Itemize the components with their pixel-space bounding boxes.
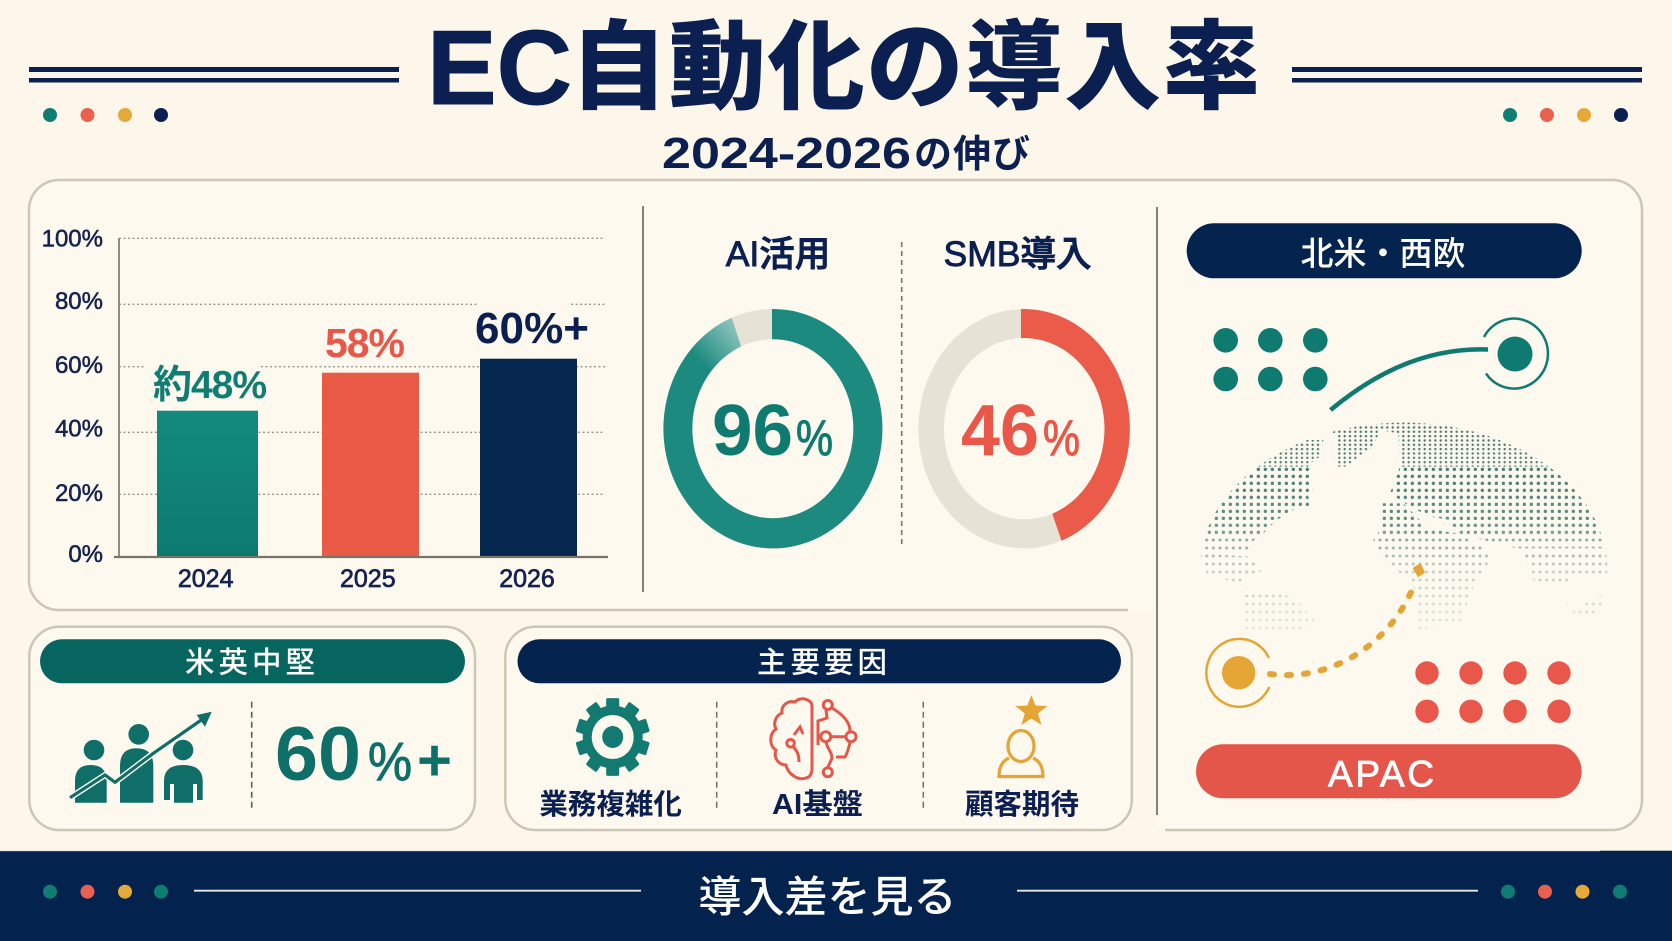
- donut: SMB導入 46%: [918, 309, 1130, 548]
- x axis labels: 2026: [499, 565, 555, 593]
- dot grid: 北米・西欧: [1213, 328, 1328, 391]
- label: AI基盤: AI基盤: [772, 788, 863, 821]
- footer bar: [0, 850, 1672, 941]
- label: 業務複雑化: 業務複雑化: [539, 789, 682, 821]
- icon: brain circuit: [771, 699, 856, 779]
- panel: 米英中堅: [29, 627, 475, 830]
- footer dots right: [1501, 885, 1627, 899]
- header dots left: [43, 108, 168, 122]
- stat: 60%+: %: [368, 732, 412, 792]
- arrow: APAC dashed curve and target: [1206, 563, 1425, 707]
- dot grid: APAC: [1415, 661, 1571, 723]
- pill: APAC: APAC: [1328, 754, 1434, 794]
- footer dots left: [43, 885, 168, 899]
- subtitle: 2024-2026: [662, 129, 911, 178]
- pill heading: 主要要因: 主要要因: [757, 646, 891, 680]
- x axis labels: [178, 565, 555, 593]
- donut heading: AI活用: AI活用: [726, 234, 830, 274]
- pill: 北米・西欧: [1187, 223, 1582, 278]
- value label 2026: 60%+: [475, 304, 589, 353]
- donut heading: SMB導入: SMB導入: [944, 234, 1091, 274]
- header rules left: [29, 67, 399, 82]
- pill: APAC: [1196, 744, 1582, 798]
- y axis labels: 0%: [68, 541, 103, 568]
- donut: SMB導入 46%: 46: [961, 391, 1039, 471]
- y axis labels: 60%: [55, 352, 103, 379]
- title: EC: [427, 9, 572, 127]
- donut: SMB導入 46%: %: [1043, 410, 1080, 466]
- y axis labels: 20%: [55, 480, 103, 507]
- bar: 2025: [322, 373, 419, 557]
- pill heading: 主要要因: [518, 639, 1121, 683]
- x axis labels: 2024: [178, 565, 234, 593]
- pill heading: 米英中堅: 米英中堅: [185, 646, 319, 680]
- dotted globe map: [1183, 420, 1617, 633]
- label: 顧客期待: 顧客期待: [965, 789, 1079, 821]
- panel: main background: [29, 180, 1642, 830]
- pill heading: 米英中堅: [40, 639, 465, 683]
- y axis labels: 40%: [55, 416, 103, 443]
- stat: 60%+: 60: [275, 712, 361, 797]
- bar: 2026: [480, 359, 577, 557]
- donut: AI活用 96%: %: [796, 410, 833, 466]
- x axis labels: 2025: [340, 565, 396, 593]
- footer text: 導入差を見る: [698, 874, 956, 922]
- stat: 60%+: +: [417, 728, 452, 793]
- header rules right: [1292, 67, 1642, 82]
- panel: 主要要因: [505, 627, 1132, 830]
- subtitle: の伸び: [914, 134, 1030, 176]
- pill: 北米・西欧: 北米・西欧: [1300, 235, 1466, 272]
- value label 2024: 約48%: [153, 364, 267, 407]
- arrow: north america curve and target: [1330, 319, 1548, 410]
- donut: AI活用 96%: [663, 309, 882, 548]
- title: 自動化の導入率: [570, 13, 1260, 122]
- icon: people with growth arrow: [70, 712, 212, 803]
- value label 2025: 58%: [325, 320, 405, 366]
- stat: 60%+: [275, 712, 452, 797]
- bar: 2024: [157, 411, 258, 557]
- subtitle: [662, 129, 1030, 178]
- icon: customer with star: [999, 695, 1048, 776]
- icon: gear: [576, 698, 650, 776]
- y axis labels: [42, 226, 103, 568]
- bar chart: [42, 226, 608, 593]
- header dots right: [1503, 108, 1628, 122]
- donut: AI活用 96%: 96: [712, 391, 793, 471]
- y axis labels: 80%: [55, 288, 103, 315]
- y axis labels: 100%: [42, 226, 103, 253]
